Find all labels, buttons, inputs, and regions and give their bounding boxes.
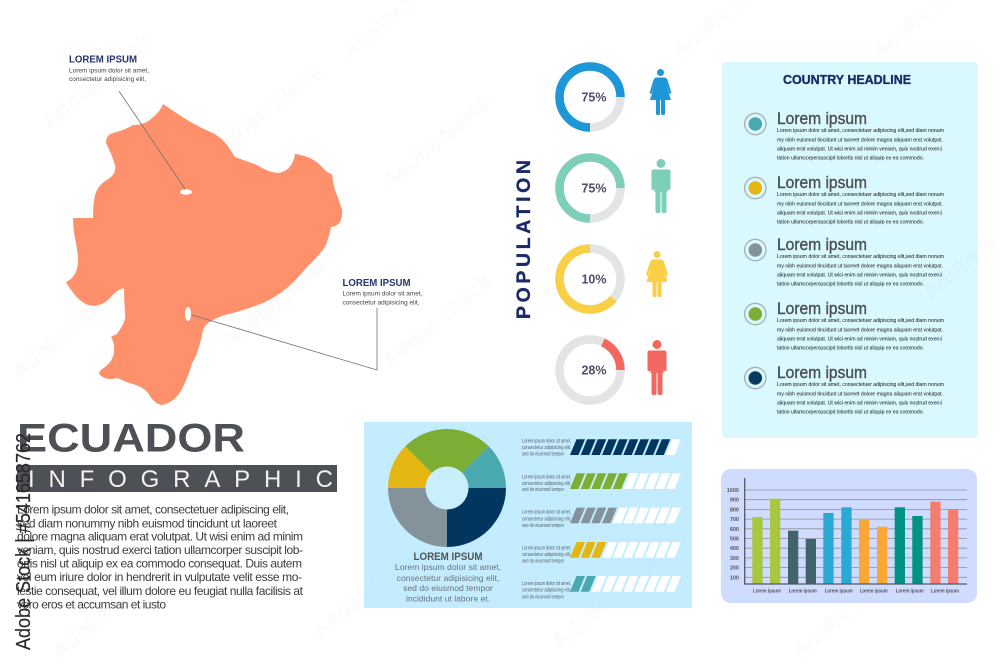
y axis labels: 200 xyxy=(730,566,739,572)
y axis labels: 100 xyxy=(730,575,739,581)
progress row 1: sed do eiusmod tempor xyxy=(522,452,564,458)
text block: intro paragraph: veniam, quis nostrud exerci tation ullamcorper suscipit lob- xyxy=(17,543,303,557)
faint stock watermark: Adobe Stock xyxy=(7,278,127,384)
icon: woman blue xyxy=(650,69,672,115)
list item 3: my nibh euismod tincidunt ut laoreet dolore magna aliquam erat volutpat. xyxy=(777,263,943,269)
x axis labels: Lorem ipsum xyxy=(753,588,781,594)
progress row 1: Lorem ipsum dolor sit amet, xyxy=(522,438,571,444)
faint stock watermark: Adobe Stock xyxy=(547,548,667,654)
pie caption xyxy=(395,551,501,604)
list item 1 xyxy=(745,110,944,161)
y axis labels: 500 xyxy=(730,536,739,542)
list item 1: Lorem ipsum dolor sit amet, consectetuer adipiscing elit,sed diam nonum xyxy=(777,128,944,134)
list item 4: aliquam erat volutpat. Ut wisi enim ad minim veniam, quis nostrud exerci xyxy=(777,336,942,342)
progress row 4 xyxy=(522,542,681,565)
progress row 3: sed do eiusmod tempor xyxy=(522,523,564,529)
y axis labels: 800 xyxy=(730,507,739,513)
donut: 75% teal xyxy=(559,158,620,218)
faint stock watermark: Adobe Stock xyxy=(307,538,427,644)
pie caption: LOREM IPSUM xyxy=(414,551,482,563)
y axis labels: 600 xyxy=(730,527,739,533)
progress row 2: consectetur adipisicing elit, xyxy=(522,481,571,487)
callout: top map label: Lorem ipsum dolor sit amet, xyxy=(69,67,149,74)
list item 2: my nibh euismod tincidunt ut laoreet dolore magna aliquam erat volutpat. xyxy=(777,201,943,207)
list item 4 xyxy=(745,300,944,351)
donut: 75% blue xyxy=(559,66,620,128)
y axis labels xyxy=(727,488,739,581)
list item 5: tation ullamcorpersuscipit lobortis nisl ut aliquip ex ea commodo. xyxy=(777,409,924,415)
progress row 5: consectetur adipisicing elit, xyxy=(522,588,571,594)
callout: lower map label xyxy=(192,277,423,370)
list item 1: my nibh euismod tincidunt ut laoreet dolore magna aliquam erat volutpat. xyxy=(777,137,943,143)
callout: lower map label: consectetur adipisicing elit, xyxy=(342,299,420,306)
panel: pie and progress bars xyxy=(364,422,692,608)
pie caption: incididunt ut labore et. xyxy=(406,594,490,604)
subtitle banner: infographic: INFOGRAPHIC xyxy=(28,466,333,493)
progress row 4: Lorem ipsum dolor sit amet, xyxy=(522,545,571,551)
pie caption: Lorem ipsum dolor sit amet, xyxy=(395,562,501,572)
list item 2: tation ullamcorpersuscipit lobortis nisl ut aliquip ex ea commodo. xyxy=(777,219,924,225)
text block: intro paragraph: lestie consequat, vel illum dolore eu feugiat nulla facilisis at xyxy=(17,584,304,598)
x axis labels xyxy=(753,588,959,594)
text block: intro paragraph: dolore magna aliquam erat volutpat. Ut wisi enim ad minim xyxy=(17,530,303,544)
progress row 2: sed do eiusmod tempor xyxy=(522,487,564,493)
faint stock watermark: Adobe Stock xyxy=(37,28,157,134)
callout: top map label xyxy=(69,54,185,189)
progress row 5: sed do eiusmod tempor xyxy=(522,594,564,600)
progress row 4: sed do eiusmod tempor xyxy=(522,559,564,565)
callout: top map label: consectetur adipisicing elit, xyxy=(69,76,146,83)
list item 3 xyxy=(745,236,944,287)
heading: population: POPULATION xyxy=(513,160,535,319)
list item 5: Lorem ipsum xyxy=(777,364,867,382)
faint stock watermark: Adobe Stock xyxy=(217,248,337,354)
progress row 2 xyxy=(522,473,681,493)
donut: 75% teal: 75% xyxy=(581,182,607,196)
x axis labels: Lorem ipsum xyxy=(860,588,888,594)
text block: intro paragraph: ortis nisl ut aliquip ex ea commodo consequat. Duis autem xyxy=(17,557,302,571)
list item 4: my nibh euismod tincidunt ut laoreet dolore magna aliquam erat volutpat. xyxy=(777,327,943,333)
donut: 75% blue: 75% xyxy=(581,90,607,104)
donut: 10% yellow xyxy=(560,248,620,310)
progress row 5 xyxy=(522,576,681,600)
faint stock watermark: Adobe Stock xyxy=(377,268,497,374)
text block: intro paragraph: vero eros et accumsan et iusto xyxy=(17,597,166,611)
list item 3: Lorem ipsum dolor sit amet, consectetuer adipiscing elit,sed diam nonum xyxy=(777,254,944,260)
x axis labels: Lorem ipsum xyxy=(896,588,924,594)
faint stock watermark: Adobe Stock xyxy=(787,558,907,664)
faint stock watermark: Adobe Stock xyxy=(47,558,167,664)
bars xyxy=(752,499,958,584)
list item 4: tation ullamcorpersuscipit lobortis nisl ut aliquip ex ea commodo. xyxy=(777,345,924,351)
faint stock watermark: Adobe Stock xyxy=(207,58,327,164)
panel: bar chart xyxy=(721,469,977,603)
list item 5: Lorem ipsum dolor sit amet, consectetuer adipiscing elit,sed diam nonum xyxy=(777,382,944,388)
title: Ecuador: ECUADOR xyxy=(17,417,245,461)
text block: intro paragraph: sed diam nonummy nibh euismod tincidunt ut laoreet xyxy=(17,516,278,530)
list item 1: Lorem ipsum xyxy=(777,110,867,128)
donut: 10% yellow: 10% xyxy=(581,272,607,286)
donut: 28% red xyxy=(560,340,620,400)
x axis labels: Lorem ipsum xyxy=(825,588,853,594)
list item 1: tation ullamcorpersuscipit lobortis nisl ut aliquip ex ea commodo. xyxy=(777,155,924,161)
icon: woman yellow xyxy=(646,251,668,297)
x axis labels: Lorem ipsum xyxy=(931,588,959,594)
vertical stock credit: Adobe Stock | #541658762 xyxy=(13,433,35,650)
list item 5: my nibh euismod tincidunt ut laoreet dolore magna aliquam erat volutpat. xyxy=(777,391,943,397)
y axis labels: 1000 xyxy=(727,488,739,494)
progress row 3: Lorem ipsum dolor sit amet, xyxy=(522,510,571,516)
list item 5: aliquam erat volutpat. Ut wisi enim ad minim veniam, quis nostrud exerci xyxy=(777,400,942,406)
list item 5 xyxy=(745,364,944,415)
faint stock watermark: Adobe Stock xyxy=(377,88,497,194)
list item 2: aliquam erat volutpat. Ut wisi enim ad minim veniam, quis nostrud exerci xyxy=(777,210,942,216)
icon: man teal xyxy=(652,159,670,213)
donut: 28% red: 28% xyxy=(581,364,607,378)
list item 3: tation ullamcorpersuscipit lobortis nisl ut aliquip ex ea commodo. xyxy=(777,281,924,287)
pie caption: sed do eiusmod tempor xyxy=(403,583,493,593)
heading: country headline: COUNTRY HEADLINE xyxy=(783,72,911,87)
list item 3: aliquam erat volutpat. Ut wisi enim ad minim veniam, quis nostrud exerci xyxy=(777,272,942,278)
pie chart xyxy=(388,429,506,547)
x axis labels: Lorem ipsum xyxy=(789,588,817,594)
list item 2: Lorem ipsum dolor sit amet, consectetuer adipiscing elit,sed diam nonum xyxy=(777,192,944,198)
progress row 1: consectetur adipisicing elit, xyxy=(522,445,571,451)
text block: intro paragraph: vel eum iriure dolor in hendrerit in vulputate velit esse mo- xyxy=(17,570,302,584)
callout: top map label: LOREM IPSUM xyxy=(69,54,137,66)
pie caption: consectetur adipisicing elit, xyxy=(397,573,499,583)
progress row 3 xyxy=(522,508,681,529)
panel: country headline xyxy=(722,62,978,438)
list item 2: Lorem ipsum xyxy=(777,174,867,192)
y axis labels: 300 xyxy=(730,556,739,562)
list item 3: Lorem ipsum xyxy=(777,236,867,254)
list item 1: aliquam erat volutpat. Ut wisi enim ad minim veniam, quis nostrud exerci xyxy=(777,146,942,152)
y axis labels: 900 xyxy=(730,498,739,504)
progress row 1 xyxy=(522,438,681,458)
y axis labels: 700 xyxy=(730,517,739,523)
list item 2 xyxy=(745,174,944,225)
progress row 4: consectetur adipisicing elit, xyxy=(522,552,571,558)
progress row 3: consectetur adipisicing elit, xyxy=(522,516,571,522)
progress row 5: Lorem ipsum dolor sit amet, xyxy=(522,581,571,587)
text block: intro paragraph: Lorem ipsum dolor sit amet, consectetuer adipiscing elit, xyxy=(17,502,289,516)
map of Ecuador xyxy=(66,104,342,405)
y axis labels: 400 xyxy=(730,546,739,552)
icon: man red xyxy=(648,340,666,395)
text block: intro paragraph xyxy=(17,502,304,611)
progress row 2: Lorem ipsum dolor sit amet, xyxy=(522,474,571,480)
callout: lower map label: Lorem ipsum dolor sit amet, xyxy=(342,291,423,298)
list item 4: Lorem ipsum xyxy=(777,300,867,318)
callout: lower map label: LOREM IPSUM xyxy=(342,277,411,289)
list item 4: Lorem ipsum dolor sit amet, consectetuer adipiscing elit,sed diam nonum xyxy=(777,318,944,324)
